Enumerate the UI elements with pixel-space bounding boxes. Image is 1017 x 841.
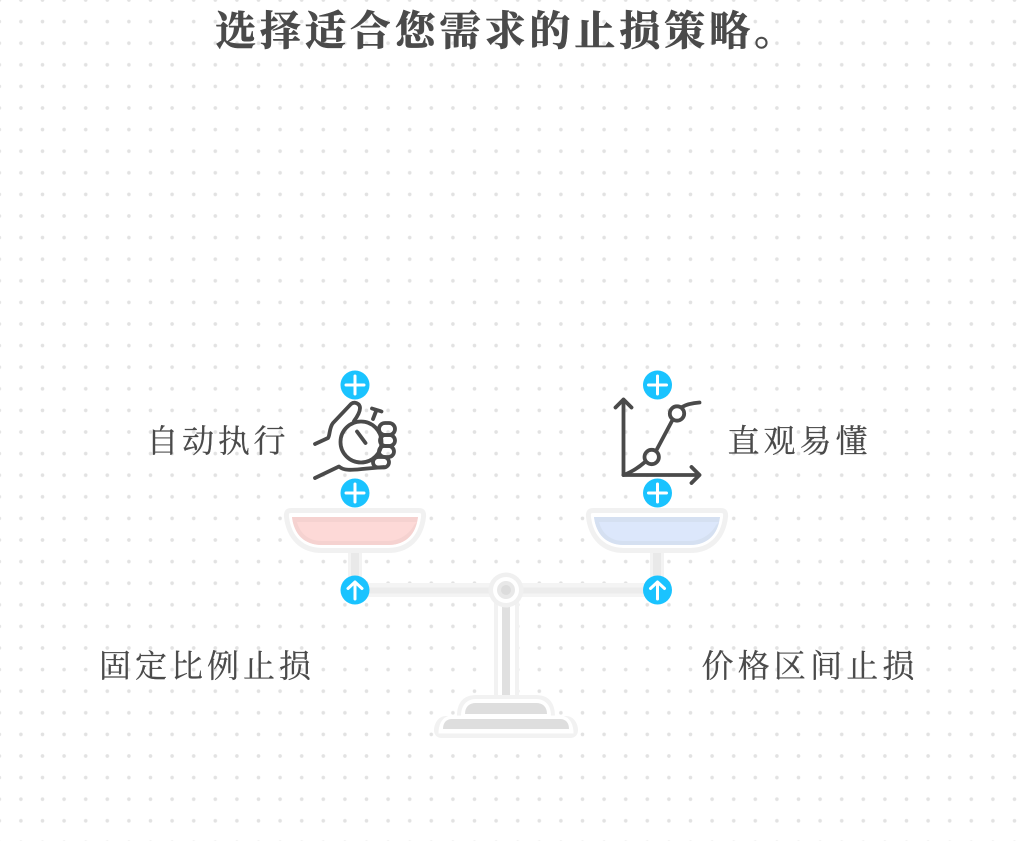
- plus badge: right top: [643, 370, 672, 400]
- label: 自动执行: 自动执行: [146, 423, 286, 459]
- label: 价格区间止损: 价格区间止损: [702, 648, 914, 684]
- pivot: [488, 572, 524, 608]
- plus badge: left bottom: [340, 478, 370, 508]
- right pan: [588, 510, 726, 550]
- left arrow badge: [340, 576, 370, 604]
- scale column: [494, 590, 519, 702]
- icon: hand holding stopwatch: [315, 403, 395, 478]
- balance scale: [286, 510, 726, 738]
- plus badge: right bottom: [643, 478, 672, 508]
- scale base: [434, 695, 578, 738]
- label: 固定比例止损: 固定比例止损: [99, 648, 311, 684]
- left pan: [286, 510, 424, 550]
- label: 直观易懂: 直观易懂: [728, 423, 868, 459]
- icon: line chart: [616, 400, 700, 483]
- right pan stem: [650, 550, 664, 590]
- right arrow badge: [643, 576, 672, 604]
- title: 选择适合您需求的止损策略。: [215, 8, 795, 54]
- left pan stem: [348, 550, 362, 590]
- plus badge: left top: [340, 370, 370, 400]
- scale beam: [355, 583, 657, 597]
